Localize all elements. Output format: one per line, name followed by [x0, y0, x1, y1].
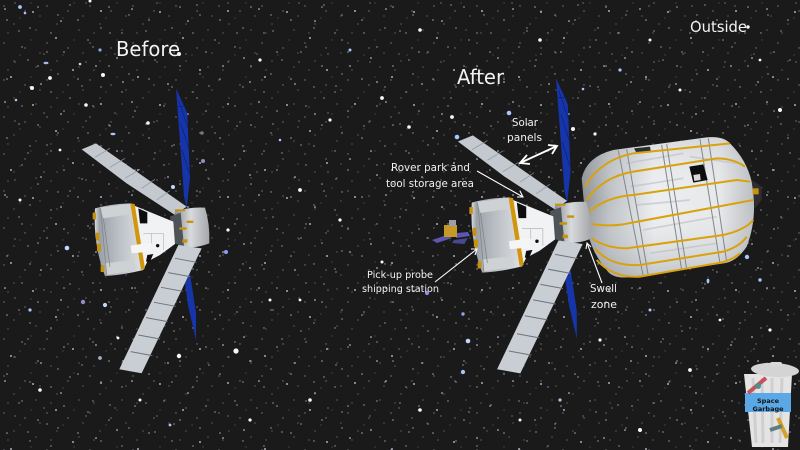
arrow: pick-up probe — [435, 249, 477, 282]
label: pick-up probe shipping station: shipping station — [362, 284, 439, 295]
label: rover park and tool storage area — [386, 162, 474, 190]
label: swell zone: zone — [591, 299, 617, 311]
label: rover park and tool storage area: tool storage area — [386, 178, 474, 190]
label: swell zone: Swell — [590, 283, 617, 295]
label: rover park and tool storage area: Rover park and — [391, 162, 470, 174]
heading: Outside: Outside — [690, 18, 747, 36]
label: swell zone — [590, 283, 617, 311]
heading: Before: Before — [116, 37, 180, 61]
icon: space garbage can — [744, 362, 799, 447]
arrow: rover park — [477, 171, 523, 197]
label: pick-up probe shipping station: Pick-up probe — [367, 270, 433, 281]
label: solar panels — [507, 117, 542, 144]
label: space garbage — [752, 397, 784, 413]
label: solar panels: Solar — [512, 117, 539, 129]
icon: satellite in can top — [748, 378, 766, 393]
heading: After: After — [457, 65, 505, 89]
label: solar panels: panels — [507, 132, 542, 144]
probe satellite — [432, 220, 470, 244]
spacecraft: after — [458, 78, 591, 373]
label: pick-up probe shipping station — [362, 270, 439, 295]
spacecraft: before — [82, 88, 209, 373]
arrow: swell zone — [586, 243, 602, 283]
inflatable habitat module — [582, 137, 762, 277]
icon: satellite in can bottom — [770, 418, 787, 438]
label: space garbage: Space — [757, 397, 780, 405]
label: space garbage: Garbage — [752, 405, 784, 413]
arrow: solar panels double-headed — [520, 145, 557, 164]
